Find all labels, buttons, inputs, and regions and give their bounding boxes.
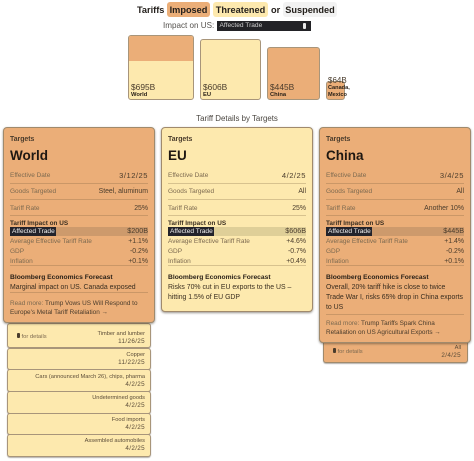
value and label <box>131 82 155 98</box>
value and label: $606B <box>203 82 227 92</box>
status pill: suspended <box>283 2 337 17</box>
panel: World: 25% <box>134 205 148 212</box>
affected trade label: Affected Trade <box>328 228 371 234</box>
status pill: imposed <box>167 2 210 17</box>
panel: China: -0.2% <box>446 248 464 255</box>
hint: for details: for details <box>22 334 47 340</box>
target name: EU <box>168 148 187 163</box>
inflation: Inflation <box>168 258 191 265</box>
title: tariffs imposed, threatened or suspended: or <box>271 5 280 15</box>
treemap label: Canada, Mexico: Mexico <box>328 92 347 98</box>
GDP: GDP <box>168 248 182 255</box>
GDP: GDP <box>10 248 24 255</box>
title: tariffs imposed, threatened or suspended <box>137 2 337 17</box>
treemap label: Canada, Mexico: Canada, <box>328 85 350 91</box>
forecast text: Marginal impact on US. Canada exposed <box>10 284 136 291</box>
row: undetermined goods: Undetermined goods <box>92 395 145 401</box>
panel: World: Steel, aluminum <box>99 188 148 195</box>
tariff rate: Tariff Rate <box>168 205 198 212</box>
row: assembled automobiles <box>7 434 151 457</box>
status pill: threatened: Threatened <box>216 5 265 15</box>
row: copper: 11/22/25 <box>118 359 145 366</box>
imposed share <box>129 36 193 61</box>
row: food imports <box>7 413 151 435</box>
row: cars: Cars (announced March 26), chips, pharma <box>35 374 145 380</box>
stacked row under China <box>323 335 468 363</box>
average effective tariff rate: Average Effective Tariff Rate <box>168 238 250 245</box>
inflation: Inflation <box>10 258 33 265</box>
panel: EU: 4/2/25 <box>282 171 306 180</box>
target name: China <box>326 148 364 163</box>
tariff impact heading: Tariff Impact on US <box>10 220 68 227</box>
status pill: threatened <box>213 2 268 17</box>
panel: EU: 25% <box>292 205 306 212</box>
affected trade value: $200B <box>127 226 148 235</box>
panel: World: +0.1% <box>128 258 148 265</box>
affected trade label: Affected Trade <box>170 228 213 234</box>
goods targeted: Goods Targeted <box>326 188 372 195</box>
affected trade bar <box>168 226 306 236</box>
goods targeted: Goods Targeted <box>168 188 214 195</box>
effective date: Effective Date <box>10 172 50 179</box>
value and label <box>203 82 227 98</box>
row: undetermined goods <box>7 391 151 414</box>
targets label: Targets <box>326 136 350 143</box>
row: copper: Copper <box>126 352 145 358</box>
value and label <box>270 82 294 98</box>
title: tariffs imposed, threatened or suspended: Tariffs <box>137 5 164 15</box>
treemap label: Canada, Mexico <box>328 76 350 98</box>
value and label: EU <box>203 92 211 98</box>
panel: EU: -0.7% <box>288 248 306 255</box>
read more link: Retaliation on US Agricultural Exports → <box>326 329 441 336</box>
tariff impact heading: Tariff Impact on US <box>326 220 384 227</box>
value and label: $695B <box>131 82 155 92</box>
row: food imports: 4/2/25 <box>125 424 145 431</box>
row: cars: 4/2/25 <box>125 381 145 388</box>
panel: EU: +0.4% <box>286 258 306 265</box>
value and label: China <box>270 92 286 98</box>
affected trade value: $445B <box>443 226 464 235</box>
average effective tariff rate: Average Effective Tariff Rate <box>326 238 408 245</box>
tariff impact heading: Tariff Impact on US <box>168 220 226 227</box>
forecast text: to US <box>326 304 343 311</box>
read more link <box>10 300 138 316</box>
forecast heading: Bloomberg Economics Forecast <box>10 274 113 281</box>
GDP: GDP <box>326 248 340 255</box>
row: cars <box>7 369 151 392</box>
targets label: Targets <box>168 136 192 143</box>
read more link: Read more: Trump Tariffs Spark China <box>326 320 435 327</box>
section heading: Tariff Details by Targets <box>196 114 278 123</box>
row: undetermined goods: 4/2/25 <box>125 402 145 409</box>
treemap label: Canada, Mexico: $64B <box>328 76 347 85</box>
read more link: Europe's Metal Tariff Retaliation → <box>10 309 108 316</box>
forecast text <box>168 284 292 301</box>
impact selector dropdown: Affected Trade <box>220 22 262 29</box>
target name: World <box>10 148 48 163</box>
forecast text <box>326 284 463 311</box>
panel: China: All <box>456 188 464 195</box>
panel: World: 3/12/25 <box>119 171 148 180</box>
row: timber and lumber: 11/26/25 <box>118 338 145 345</box>
hint: for details: for details <box>338 349 363 355</box>
row: timber and lumber <box>7 323 151 348</box>
panel: EU: All <box>298 188 306 195</box>
row: assembled automobiles: 4/2/25 <box>125 445 145 452</box>
forecast heading: Bloomberg Economics Forecast <box>326 274 429 281</box>
tariff rate: Tariff Rate <box>326 205 356 212</box>
treemap square: China <box>267 47 320 100</box>
tariff rate: Tariff Rate <box>10 205 40 212</box>
panel: China <box>319 127 471 343</box>
forecast text: Trade War I, risks 65% drop in China exports <box>326 294 463 301</box>
treemap square: Canada, Mexico <box>326 81 344 100</box>
effective date: Effective Date <box>168 172 208 179</box>
stacked row under China: 2/4/25 <box>441 352 461 359</box>
forecast heading: Bloomberg Economics Forecast <box>168 274 271 281</box>
treemap square: EU <box>200 39 261 100</box>
forecast text: Risks 70% cut in EU exports to the US – <box>168 284 291 291</box>
row: assembled automobiles: Assembled automobiles <box>85 438 145 444</box>
impact selector label: Impact on US: <box>163 21 214 30</box>
row: timber and lumber: Timber and lumber <box>97 331 145 337</box>
icon: pointer <box>302 23 306 29</box>
average effective tariff rate: Average Effective Tariff Rate <box>10 238 92 245</box>
affected trade label: Affected Trade <box>12 228 55 234</box>
affected trade value: $606B <box>285 226 306 235</box>
panel: China: 3/4/25 <box>440 171 464 180</box>
status pill: imposed: Imposed <box>170 5 207 15</box>
treemap square: World <box>128 35 194 100</box>
targets label: Targets <box>10 136 34 143</box>
goods targeted: Goods Targeted <box>10 188 56 195</box>
forecast text: Overall, 20% tariff hike is close to twice <box>326 284 445 291</box>
affected trade bar <box>326 226 464 236</box>
panel: World: -0.2% <box>130 248 148 255</box>
row: copper <box>7 348 151 370</box>
status pill: suspended: Suspended <box>285 5 335 15</box>
panel: China: +1.4% <box>444 238 464 245</box>
read more link: Read more: Trump Vows US Will Respond to <box>10 300 138 307</box>
panel: EU <box>161 127 313 312</box>
panel: World <box>3 127 155 323</box>
panel: EU: +4.6% <box>286 238 306 245</box>
panel: China: +0.1% <box>444 258 464 265</box>
value and label: World <box>131 92 147 98</box>
stacked rows under World <box>6 323 152 458</box>
affected trade bar <box>10 226 148 236</box>
effective date: Effective Date <box>326 172 366 179</box>
panel: World: +1.1% <box>128 238 148 245</box>
read more link <box>326 320 441 336</box>
stacked row under China: All <box>455 345 461 351</box>
row: food imports: Food imports <box>112 417 145 423</box>
panel: China: Another 10% <box>424 205 464 212</box>
inflation: Inflation <box>326 258 349 265</box>
forecast text: hitting 1.5% of EU GDP <box>168 294 240 301</box>
value and label: $445B <box>270 82 294 92</box>
impact selector dropdown <box>216 21 311 31</box>
